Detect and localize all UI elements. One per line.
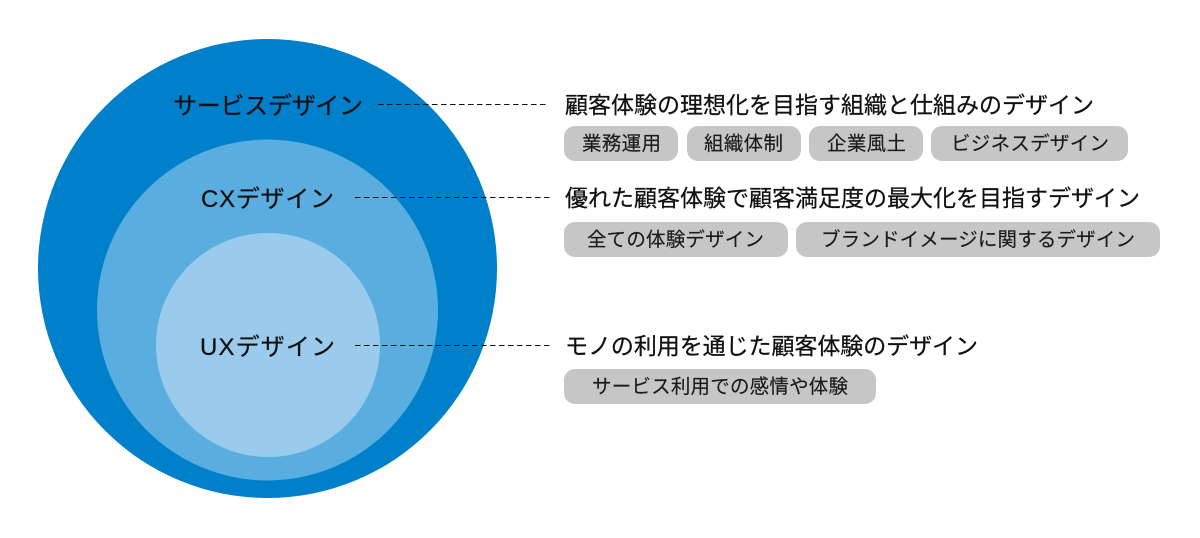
label: service design: サービスデザイン bbox=[173, 93, 363, 120]
tag: サービス利用での感情や体験 bbox=[564, 369, 876, 404]
tag: 業務運用: 業務運用 bbox=[582, 133, 661, 155]
tag: サービス利用での感情や体験: サービス利用での感情や体験 bbox=[592, 376, 848, 398]
tag: 組織体制: 組織体制 bbox=[704, 133, 783, 155]
label: UX design: UXデザイン bbox=[200, 334, 335, 361]
tag: 企業風土: 企業風土 bbox=[827, 133, 906, 155]
tag: ビジネスデザイン: ビジネスデザイン bbox=[951, 133, 1109, 155]
tag: 業務運用 bbox=[564, 126, 678, 161]
heading: CX design description: 優れた顧客体験で顧客満足度の最大化を目指すデザイン bbox=[565, 185, 1140, 211]
inner circle: UX design bbox=[156, 233, 380, 457]
tag: 組織体制 bbox=[687, 126, 801, 161]
tag: ブランドイメージに関するデザイン bbox=[796, 222, 1160, 257]
outer circle: service design bbox=[38, 39, 497, 498]
middle circle: CX design bbox=[97, 140, 438, 480]
label: CX design: CXデザイン bbox=[201, 186, 334, 213]
tag: ブランドイメージに関するデザイン: ブランドイメージに関するデザイン bbox=[821, 228, 1135, 251]
connector: CX design bbox=[355, 196, 553, 198]
connector: service design bbox=[378, 104, 549, 106]
tag: 企業風土 bbox=[809, 126, 923, 161]
tag: 全ての体験デザイン bbox=[564, 222, 788, 257]
connector: UX design bbox=[355, 344, 553, 346]
tag: 全ての体験デザイン: 全ての体験デザイン bbox=[587, 229, 764, 251]
tag: ビジネスデザイン bbox=[931, 126, 1128, 161]
heading: service design description: 顧客体験の理想化を目指す組織と仕組みのデザイン bbox=[565, 92, 1094, 118]
heading: UX design description: モノの利用を通じた顧客体験のデザイン bbox=[565, 333, 978, 359]
